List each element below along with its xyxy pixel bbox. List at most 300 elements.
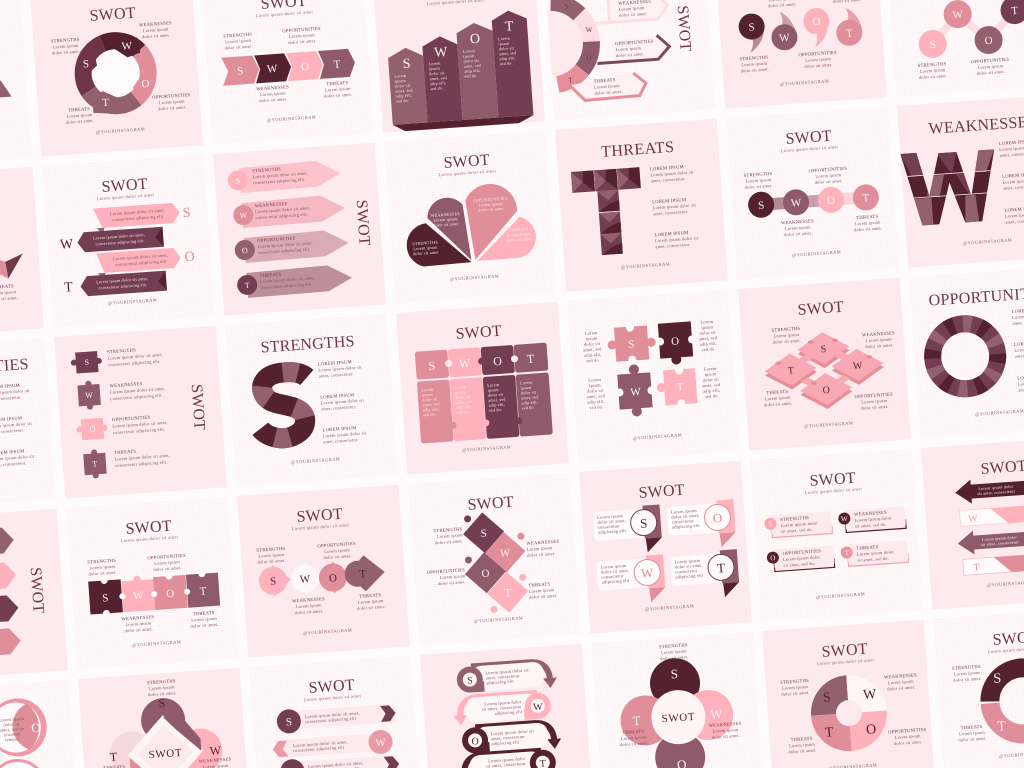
ring center	[89, 47, 142, 100]
label: opportunities	[147, 553, 187, 572]
tab W: W	[641, 565, 655, 581]
table columns: O	[493, 354, 503, 368]
circle O: tempor.	[5, 736, 20, 742]
handle: @YOURINSTAGRAM	[645, 603, 694, 612]
text: lower right: Lorem	[704, 366, 717, 372]
label: strengths: dolor sit amet.	[740, 66, 769, 73]
tab T: T	[717, 560, 726, 576]
text: lower left: Lorem	[588, 377, 601, 383]
speech circles: S	[748, 21, 755, 34]
label: weaknesses	[781, 218, 815, 237]
hexagon bars	[0, 527, 22, 657]
table columns: sed do.	[456, 409, 469, 415]
text: upper left: adip elit,	[584, 352, 602, 359]
faceted letter S	[257, 371, 311, 440]
card: WEAKNESSES letter	[897, 95, 1024, 271]
hook: opportunities: Lorem ipsum	[615, 45, 642, 52]
circle letters: T	[109, 749, 118, 764]
text: lower left: ipsum	[589, 382, 601, 388]
table columns: Lorem	[520, 380, 533, 386]
step S	[456, 661, 558, 694]
label: threats	[356, 592, 385, 611]
label: threats: THREATS	[68, 106, 90, 113]
ribbon stack: Lorem ipsum dolor sit amet,	[93, 232, 145, 242]
pill: threats: sit amet, sed do.	[857, 556, 889, 564]
puzzle icons: O	[89, 424, 96, 434]
label: opportunities: Lorem ipsum	[805, 56, 831, 63]
tab S: adipiscing elit	[598, 528, 627, 535]
label: weaknesses	[765, 0, 799, 9]
puzzle strip: W	[133, 590, 145, 603]
circles: T	[1011, 5, 1019, 17]
handle: @YOURINSTAGRAM	[975, 408, 1024, 417]
card: speech circles	[714, 0, 887, 109]
circles	[227, 169, 259, 296]
petals: WEAKNESSES	[431, 211, 460, 218]
tab O: adipiscing elit	[672, 523, 701, 530]
bar chart: amet, sed	[429, 75, 447, 82]
arrow: dark: Lorem ipsum dolor	[978, 484, 1014, 491]
label: opportunities: dolor sit amet.	[158, 104, 186, 111]
label: threats: THREATS	[528, 581, 551, 588]
ribbon stack: consectetur adipiscing elit	[115, 259, 167, 267]
card: ribbons	[42, 155, 215, 328]
text: upper right: sed do.	[702, 346, 716, 352]
card: rounded circles partial	[0, 680, 80, 768]
circles: W	[952, 9, 964, 21]
label: weaknesses: WEAKNESSES	[862, 330, 895, 337]
pill: opportunities	[766, 545, 835, 572]
ring letters: O	[141, 78, 150, 90]
tab S: S	[640, 515, 648, 531]
label: weaknesses: WEAKNESSES	[781, 218, 814, 225]
card: circle tabs	[579, 461, 752, 634]
tab O: consectetur	[672, 518, 694, 525]
vertical title: SWOT	[27, 567, 47, 614]
label: threats: Lorem ipsum	[765, 395, 791, 401]
label: weaknesses: dolor sit amet.	[142, 32, 170, 39]
pill: weaknesses	[838, 506, 906, 533]
label: opportunities: OPPORTUNITIES	[282, 26, 321, 33]
icon: triangle	[0, 80, 12, 98]
strip S: Lorem ipsum dolor sit amet,	[304, 710, 360, 720]
pill: threats: T	[844, 549, 850, 557]
strip: T: T	[973, 562, 980, 574]
table columns: S	[428, 358, 436, 373]
circle letters: S	[158, 696, 166, 710]
subtitle: Lorem ipsum dolor sit amet	[291, 522, 350, 531]
card: SWOT chevrons	[201, 0, 374, 145]
label: threats: Lorem ipsum	[191, 616, 217, 623]
table columns: amet, sed	[422, 401, 440, 408]
ribbon stack: consectetur adipiscing elit	[98, 282, 147, 290]
pill: opportunities: O	[770, 554, 776, 562]
tab T: Lorem ipsum	[674, 558, 701, 565]
label: opportunities: OPPORTUNITIES	[971, 57, 1010, 64]
text block 2: Lorem ipsum dolor sit	[321, 397, 365, 406]
label: opportunities: dolor sit amet.	[438, 579, 466, 586]
handle: @YOURINSTAGRAM	[303, 627, 352, 636]
text block 2: amet, consectetur.	[653, 209, 688, 217]
table columns: sed do.	[423, 411, 436, 417]
subtitle: Lorem ipsum dolor sit amet	[96, 192, 155, 201]
card: diamond SWOT	[78, 668, 251, 768]
text block 1: amet, consectetur.	[651, 176, 686, 184]
step S: amet, consectetur	[486, 673, 520, 681]
step T	[463, 749, 557, 768]
label: strengths: STRENGTHS	[256, 546, 286, 553]
quadrant chart: W	[863, 687, 878, 703]
text: upper right: adip elit,	[699, 341, 717, 348]
list text: WEAKNESSES	[255, 201, 288, 208]
petals: STRENGTHS	[412, 239, 439, 246]
bar chart: amet, sed	[395, 87, 413, 95]
list text: consectetur adipiscing elit.	[260, 281, 313, 290]
label: weaknesses: Lorem ipsum	[888, 679, 914, 685]
text block 3	[322, 424, 367, 445]
petals	[403, 181, 537, 268]
tab W: adipiscing elit	[602, 578, 630, 585]
text: upper right: ipsum	[701, 324, 714, 330]
speech circles	[738, 5, 863, 53]
ribbon stack	[75, 203, 185, 297]
text: lower right: ipsum	[704, 371, 717, 377]
list text: Lorem ipsum dolor sit amet,	[114, 453, 170, 463]
text block 2	[320, 391, 365, 412]
hook: weaknesses	[593, 0, 668, 24]
puzzle strip: T	[199, 585, 207, 598]
tab T: consectetur	[675, 568, 698, 575]
handle: @YOURINSTAGRAM	[267, 114, 316, 123]
pill: opportunities: Lorem ipsum dolor	[783, 554, 821, 562]
handle: @YOURINSTAGRAM	[474, 615, 523, 624]
circle O: O	[31, 720, 41, 735]
pill: threats	[840, 540, 909, 567]
list text	[252, 164, 316, 290]
label: opportunities: dolor sit amet.	[323, 553, 352, 560]
text block 1: Lorem ipsum dolor sit	[650, 169, 694, 177]
label: threats: Lorem ipsum	[529, 587, 555, 594]
table columns	[415, 343, 553, 444]
circle letters: W	[209, 743, 222, 758]
text: upper right	[697, 319, 719, 352]
list text: Lorem ipsum dolor sit amet,	[253, 170, 308, 180]
pill: strengths: S	[768, 520, 773, 528]
hook: weaknesses: Lorem ipsum	[619, 5, 645, 12]
puzzle strip: S	[102, 592, 109, 605]
text: lower right: dolor sit	[703, 377, 720, 383]
bar chart: ipsum	[395, 78, 407, 84]
label: threats	[957, 724, 987, 743]
card: arrows and strips	[921, 437, 1024, 610]
text block 2: amet, consectetur.	[321, 404, 356, 412]
text: upper left: dolor sit	[584, 341, 601, 347]
table columns: adip elit,	[456, 404, 472, 411]
label: weaknesses: Lorem ipsum	[143, 26, 169, 33]
label: weaknesses: Lorem ipsum	[296, 602, 322, 609]
quadrant chart	[808, 673, 889, 754]
label: strengths	[743, 171, 774, 190]
list text: Lorem ipsum dolor sit amet,	[255, 205, 311, 215]
label: weaknesses	[708, 721, 743, 740]
hook: opportunities: OPPORTUNITIES	[615, 38, 654, 46]
circles: T	[244, 281, 250, 290]
title: SWOT	[101, 176, 148, 196]
label: weaknesses: WEAKNESSES	[256, 84, 289, 91]
text block 2: Lorem ipsum dolor sit	[652, 202, 697, 210]
card: hexagon list with vertical title	[0, 509, 68, 682]
pill: strengths	[764, 511, 832, 538]
connectors	[772, 192, 856, 210]
table columns: Lorem	[454, 384, 467, 390]
puzzle icons: T	[92, 459, 98, 469]
tab S: consectetur	[598, 523, 621, 530]
ring arrow notches	[79, 37, 156, 116]
label: opportunities: Lorem ipsum	[324, 547, 350, 554]
list text: Lorem ipsum dolor sit amet,	[257, 240, 313, 250]
card: arrow ring	[933, 608, 1024, 768]
text: lower left: amet, sed	[586, 393, 606, 400]
label: opportunities	[282, 26, 322, 45]
label: threats	[763, 389, 792, 407]
label: opportunities	[888, 727, 928, 746]
bar chart: adip elit,	[499, 55, 516, 62]
card: half circle hooks	[485, 0, 716, 125]
text: lower right: adip elit,	[703, 388, 721, 395]
chain circles: W	[791, 197, 802, 210]
label: strengths	[51, 37, 81, 56]
handle: @YOURINSTAGRAM	[804, 420, 853, 429]
bar chart: T	[504, 19, 514, 35]
label: threats	[323, 80, 352, 99]
subtitle: Lorem ipsum dolor sit amet	[303, 693, 362, 702]
tab O	[666, 499, 737, 551]
subtitle: Lorem ipsum dolor sit amet	[255, 9, 314, 18]
label: threats: Lorem ipsum	[325, 86, 351, 93]
tails	[748, 6, 863, 53]
label: opportunities: Lorem ipsum	[440, 573, 466, 580]
ribbon stack: Lorem ipsum dolor sit amet,	[110, 208, 165, 217]
label: strengths: STRENGTHS	[51, 37, 80, 44]
strip S: S	[285, 716, 292, 729]
pill: threats: Lorem ipsum dolor	[857, 549, 895, 557]
text block 3: LOREM IPSUM	[654, 230, 689, 237]
bar chart: ipsum	[463, 53, 475, 59]
label: opportunities: OPPORTUNITIES	[427, 567, 465, 575]
label: weaknesses: Lorem ipsum	[712, 727, 739, 734]
isometric pieces	[762, 328, 886, 413]
step W: Lorem ipsum dolor	[484, 699, 522, 707]
list text: WEAKNESSES	[109, 381, 143, 388]
label: opportunities: Lorem ipsum	[289, 32, 315, 39]
step T: Lorem ipsum dolor	[488, 756, 526, 763]
card: arrow list	[213, 143, 386, 316]
card: flower	[591, 632, 764, 768]
label: opportunities: OPPORTUNITIES	[854, 391, 893, 399]
tab O: Lorem ipsum	[671, 508, 697, 515]
label: threats: dolor sit amet.	[66, 118, 94, 125]
label: strengths: dolor sit amet.	[224, 44, 253, 51]
petals: Lorem ipsum	[478, 201, 503, 208]
label: strengths: STRENGTHS	[147, 678, 176, 685]
label: strengths: Lorem ipsum	[741, 61, 768, 67]
petals: THREATS	[509, 226, 529, 233]
bar chart: sed do.	[430, 85, 443, 91]
label: weaknesses	[862, 330, 896, 349]
step O: O	[471, 736, 479, 748]
isometric pieces: T	[787, 365, 794, 377]
pill: weaknesses: WEAKNESSES	[854, 510, 887, 517]
list text	[107, 345, 170, 468]
handle: @YOURINSTAGRAM	[780, 78, 829, 87]
text block 1	[999, 138, 1024, 159]
ring letters: O	[586, 54, 592, 62]
title: SWOT	[797, 299, 844, 319]
label: opportunities: dolor sit amet.	[804, 62, 833, 69]
card: circle puzzle	[762, 620, 935, 768]
label: threats: dolor sit amet.	[357, 604, 385, 611]
card: petal cloud	[384, 131, 557, 304]
label: threats: Lorem ipsum	[66, 112, 93, 119]
text block 2: LOREM IPSUM	[320, 392, 354, 400]
text block 3	[0, 448, 35, 469]
pyramid icon	[0, 254, 24, 280]
label: strengths	[659, 642, 689, 661]
tab W: dolor sit amet,	[601, 568, 629, 576]
label: opportunities	[798, 50, 838, 69]
list text: Lorem ipsum dolor sit amet,	[107, 352, 163, 362]
list text: consectetur adipiscing elit.	[115, 459, 168, 468]
title: SWOT	[296, 506, 343, 526]
chain circles: S	[758, 200, 765, 212]
label: strengths: Lorem ipsum	[920, 67, 946, 74]
ring chart	[67, 24, 165, 122]
label: strengths: Lorem ipsum	[258, 552, 285, 559]
card: SWOT ring	[30, 0, 203, 157]
ring letters: T	[102, 97, 110, 109]
bar chart: Lorem	[428, 60, 441, 66]
ring letters: S	[564, 2, 569, 11]
petal letters: T	[632, 713, 641, 728]
list text: OPPORTUNITIES	[257, 235, 296, 243]
list text: consectetur adipiscing elit.	[108, 359, 161, 367]
table columns: W	[459, 356, 471, 371]
label: strengths	[739, 54, 769, 73]
text block 1: LOREM IPSUM	[650, 164, 684, 171]
label: strengths: STRENGTHS	[739, 54, 769, 61]
petals: Lorem ipsum	[413, 244, 438, 251]
circles: O	[242, 246, 248, 255]
bar chart: ipsum	[429, 65, 441, 71]
label: strengths: dolor sit amet.	[52, 49, 80, 56]
label: opportunities	[808, 166, 848, 185]
bar chart: dolor sit	[395, 83, 411, 89]
card: pyramid threats partial	[0, 167, 44, 340]
hook: opportunities: dolor sit amet.	[616, 51, 644, 58]
text block 3: Lorem ipsum dolor sit	[323, 430, 367, 438]
label: strengths	[433, 526, 464, 545]
ring segments	[487, 0, 613, 106]
label: threats: Lorem ipsum	[621, 734, 647, 741]
title: SWOT	[809, 470, 856, 490]
faceted ring	[918, 309, 1013, 404]
linked shapes: S	[270, 575, 277, 588]
label: strengths: dolor sit amet.	[88, 570, 117, 577]
text: upper left: Lorem	[585, 330, 598, 336]
side letters: W	[59, 237, 74, 253]
card: linked shapes	[237, 485, 410, 658]
title: SWOT	[125, 518, 172, 538]
title: SWOT	[467, 494, 514, 514]
label: opportunities: dolor sit amet.	[288, 38, 317, 45]
label: weaknesses: Lorem ipsum	[866, 336, 892, 343]
step O	[461, 721, 562, 755]
text: upper right: dolor sit	[699, 330, 716, 336]
linked shapes: T	[359, 568, 367, 581]
card: diagonal puzzle	[408, 473, 581, 646]
title: SWOT	[308, 677, 355, 697]
pill: strengths: Lorem ipsum dolor	[780, 520, 818, 528]
pill: weaknesses: sit amet, sed do.	[855, 522, 887, 530]
tab T	[670, 549, 740, 601]
label: opportunities: Lorem ipsum	[159, 98, 185, 105]
bar chart: dolor sit	[463, 58, 480, 64]
label: opportunities: Lorem ipsum	[895, 733, 921, 740]
label: strengths: dolor sit amet.	[919, 73, 947, 80]
label: strengths	[952, 664, 982, 683]
ring letters: W	[121, 40, 133, 53]
label: opportunities: OPPORTUNITIES	[888, 727, 927, 734]
text block 1: Lorem ipsum dolor sit	[318, 365, 362, 373]
text block 3: amet, consectetur.	[323, 437, 359, 445]
text block 3: Lorem ipsum dolor sit	[655, 235, 699, 243]
label: threats: THREATS	[961, 724, 983, 730]
label: weaknesses: dolor sit amet.	[712, 733, 740, 740]
connectors	[931, 10, 1017, 44]
table columns: amet, sed	[521, 394, 539, 401]
hook: threats	[569, 72, 647, 101]
petal letters: W	[710, 706, 724, 722]
circle O	[0, 696, 49, 758]
list text: OPPORTUNITIES	[112, 414, 151, 422]
card: OPPORTUNITIES partial text	[0, 338, 56, 511]
quadrant chart: T	[824, 725, 835, 741]
circle O: dolor sit	[3, 721, 20, 727]
label: weaknesses: dolor sit amet.	[259, 96, 288, 103]
card: isometric puzzle	[738, 278, 911, 451]
strip W: Lorem ipsum dolor sit amet,	[292, 739, 348, 749]
label: weaknesses	[884, 672, 918, 692]
label: strengths: Lorem ipsum	[773, 332, 800, 339]
table columns: adip elit,	[521, 399, 538, 406]
card: strips with circles	[249, 656, 422, 768]
handle: @YOURINSTAGRAM	[108, 297, 157, 306]
ribbon stack: Lorem ipsum dolor sit amet,	[96, 276, 148, 285]
bar chart	[385, 9, 534, 132]
text block 2	[0, 415, 33, 436]
puzzle strip: O	[166, 588, 175, 600]
card: four puzzle pieces	[567, 290, 740, 463]
strip W: W	[375, 737, 387, 749]
label: strengths	[147, 678, 177, 697]
pill: strengths: sit amet, sed do.	[781, 527, 813, 535]
pill: strengths: STRENGTHS	[780, 515, 809, 522]
step S: adipiscing elit	[486, 678, 515, 685]
card: puzzle table	[396, 302, 569, 475]
title: SWOT	[455, 323, 502, 343]
puzzle icons: W	[85, 390, 94, 400]
label: strengths: STRENGTHS	[743, 171, 773, 178]
